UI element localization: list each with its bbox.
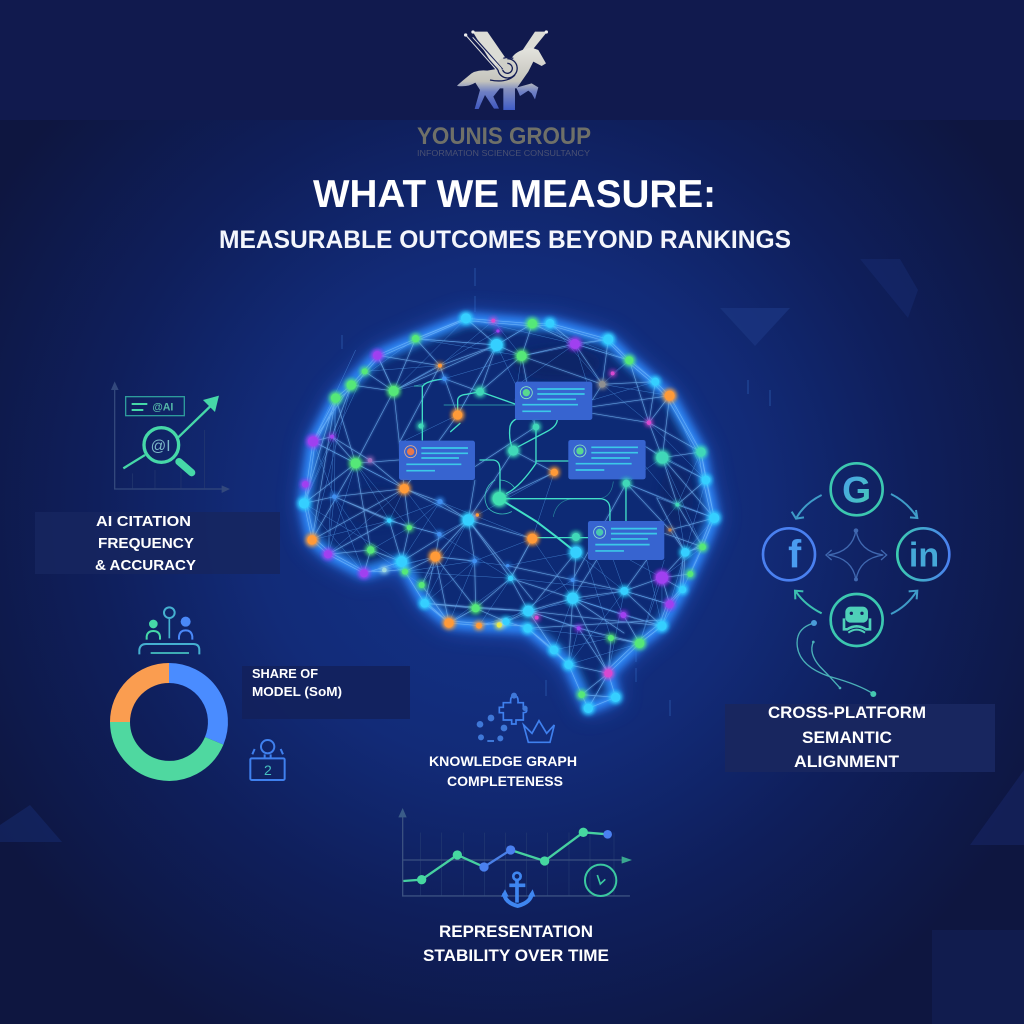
icon: facebook: f <box>788 532 802 576</box>
logo: Y letterform <box>473 32 547 110</box>
brain mesh fine lines <box>304 318 714 708</box>
icon: google: G <box>842 469 871 511</box>
icon: linkedin: in <box>909 537 939 575</box>
insight card 2 <box>515 382 592 420</box>
citation tag: @AI <box>152 401 173 413</box>
label panel: cross-platform <box>725 704 995 772</box>
label: AI citation: FREQUENCY <box>98 535 194 552</box>
label: AI citation: AI CITATION <box>96 513 191 530</box>
chart axes <box>115 387 225 489</box>
insight card 1 <box>399 441 475 480</box>
crown <box>524 721 554 742</box>
clock <box>585 865 616 896</box>
brain glow <box>304 318 714 708</box>
title: WHAT WE MEASURE: <box>313 173 716 216</box>
network nodes <box>299 313 719 713</box>
brain network <box>299 313 719 713</box>
connector tails <box>797 620 876 697</box>
label panel: AI citation <box>35 512 280 574</box>
label: AI citation <box>95 513 196 574</box>
logo tagline: INFORMATION SCIENCE CONSULTANCY <box>417 149 591 158</box>
logo <box>457 30 548 110</box>
label: share of model: SHARE OF <box>252 666 318 681</box>
subtitle: MEASURABLE OUTCOMES BEYOND RANKINGS <box>219 226 791 254</box>
icon: google <box>831 463 883 515</box>
anchor <box>501 873 535 906</box>
label: AI citation: & ACCURACY <box>95 557 196 574</box>
center star <box>826 529 887 581</box>
icon: ranked bulb <box>250 740 285 780</box>
logo: horse <box>457 30 548 109</box>
platform cycle diagram <box>763 463 949 697</box>
label: representation stability: STABILITY OVER TIME <box>423 946 609 965</box>
icon: robot <box>831 594 883 646</box>
magnifier: @I <box>151 438 170 455</box>
label: knowledge graph <box>429 753 577 789</box>
cycle arrows <box>792 494 917 614</box>
icon: AI citation chart <box>111 381 230 493</box>
label panel: share of model <box>242 666 410 719</box>
label: cross-platform: CROSS-PLATFORM <box>768 703 926 722</box>
label: share of model <box>252 666 342 699</box>
insight card 4 <box>588 521 664 560</box>
label: knowledge graph: COMPLETENESS <box>447 773 563 789</box>
label: representation stability <box>423 922 609 965</box>
donut chart: share of model <box>120 673 218 771</box>
label: representation stability: REPRESENTATION <box>439 922 593 941</box>
label: cross-platform <box>768 703 926 771</box>
label: knowledge graph: KNOWLEDGE GRAPH <box>429 753 577 769</box>
icon: linkedin <box>897 528 949 580</box>
logo wordmark: YOUNIS GROUP <box>417 123 591 150</box>
label: cross-platform: SEMANTIC <box>802 728 892 747</box>
line chart: representation stability <box>398 808 632 906</box>
insight card 3 <box>568 440 646 479</box>
icon: ranked bulb: 2 <box>264 762 272 778</box>
icon: facebook <box>763 528 815 580</box>
icon: people at table <box>139 607 199 654</box>
brain mesh lines <box>304 318 714 708</box>
teal connectors <box>414 379 626 552</box>
trend arrow <box>123 396 219 468</box>
label: cross-platform: ALIGNMENT <box>794 752 900 771</box>
label: share of model: MODEL (SoM) <box>252 684 342 699</box>
icon: knowledge graph puzzle <box>477 693 554 742</box>
